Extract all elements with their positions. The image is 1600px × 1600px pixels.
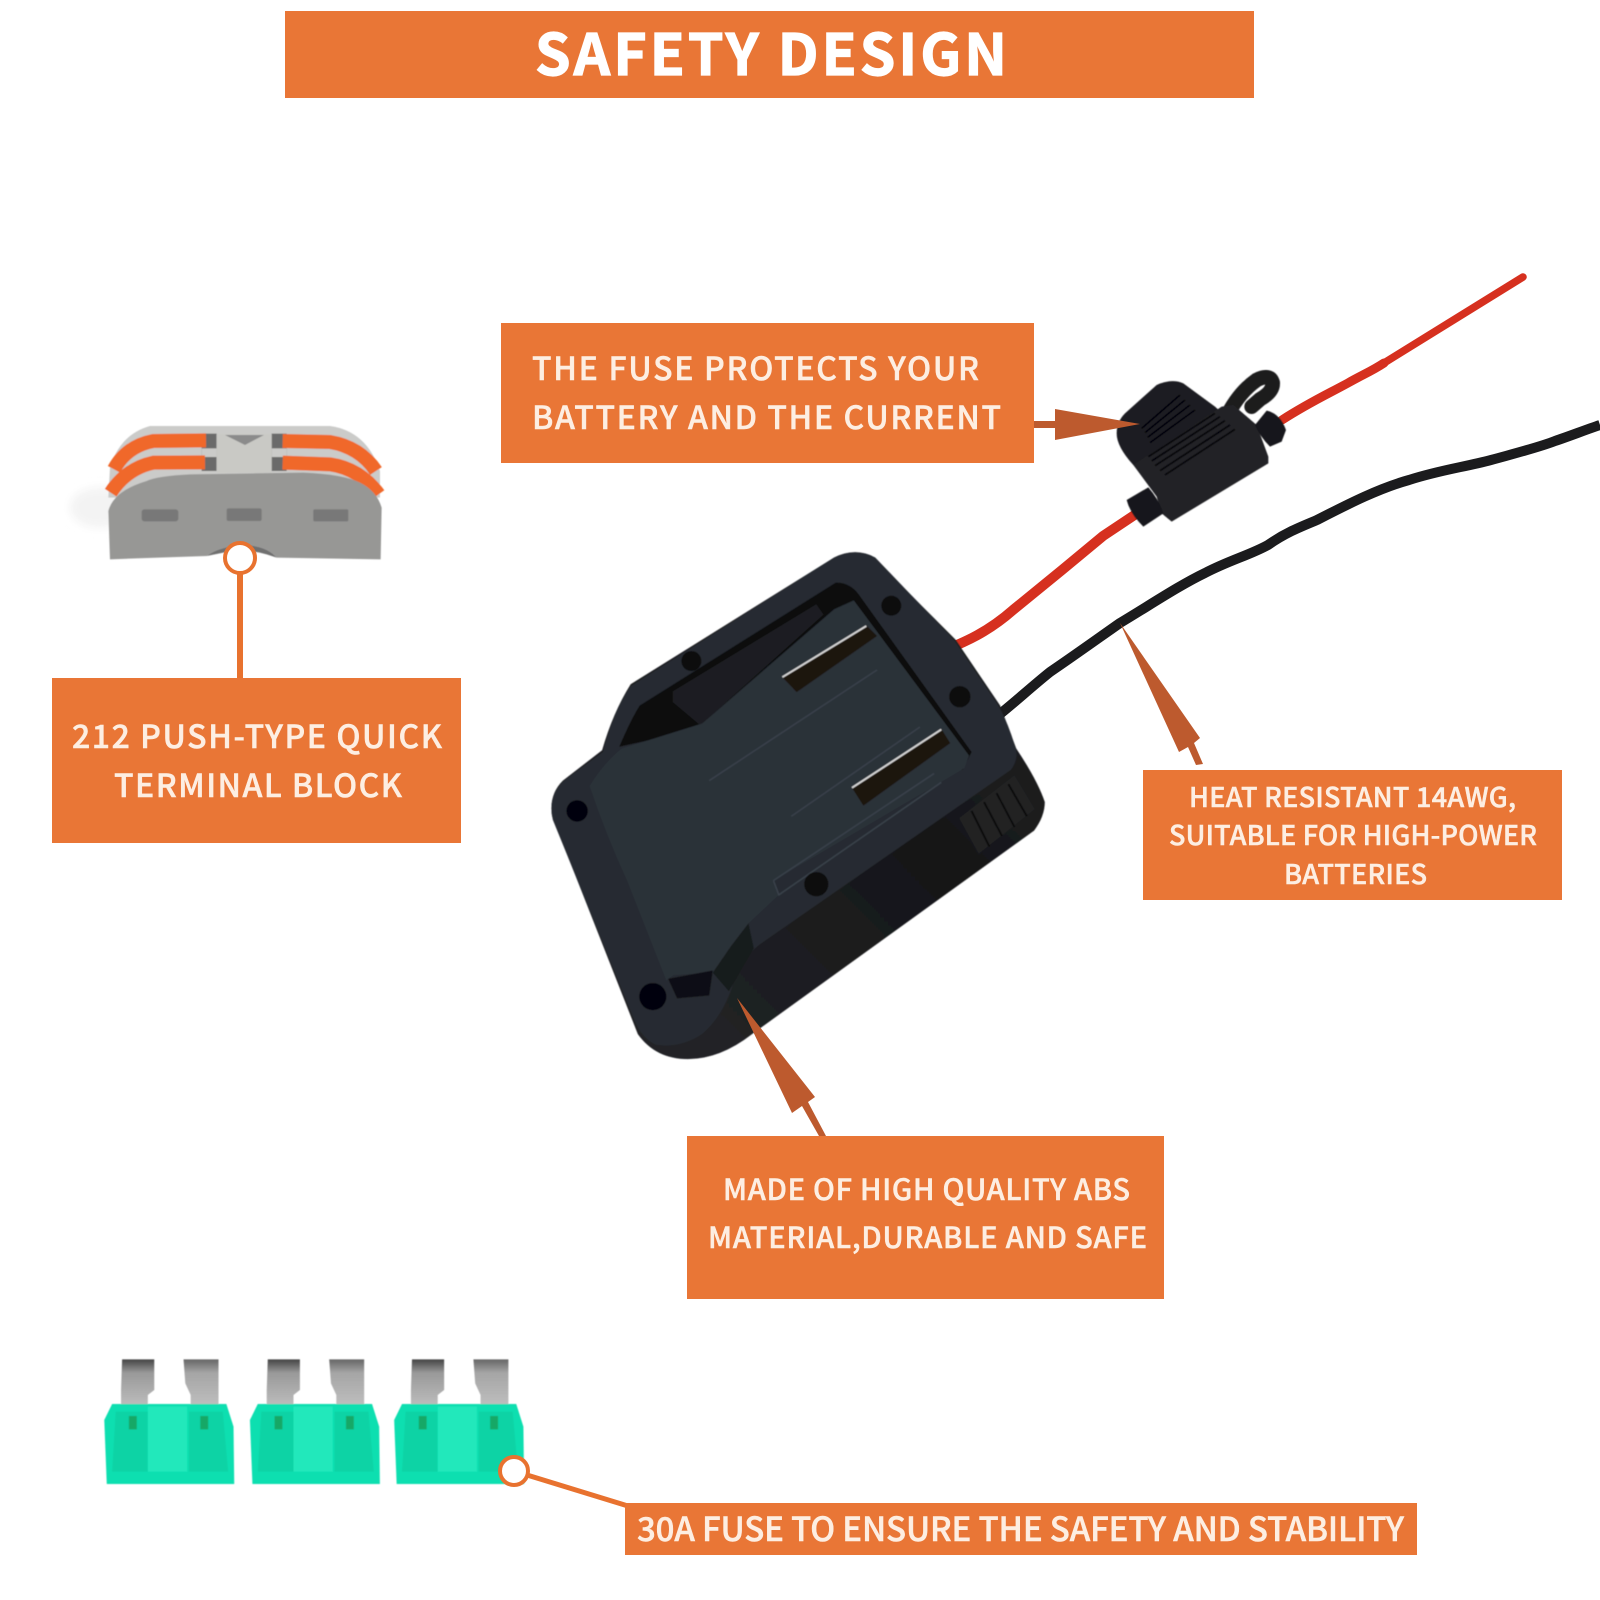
screw holes <box>681 596 971 896</box>
callout: heat resistant wire <box>1143 770 1562 900</box>
front openings <box>142 508 348 521</box>
face etched lines <box>709 670 941 895</box>
callout text: BATTERIES <box>1284 853 1427 892</box>
grip ribs <box>1142 395 1235 475</box>
lower notch <box>668 971 713 998</box>
callout: fuse protects battery <box>501 323 1034 463</box>
callout text: THE FUSE PROTECTS YOUR <box>532 344 979 390</box>
mounting holes <box>566 800 666 1010</box>
body silhouette <box>551 553 1045 1059</box>
side ribs <box>959 775 1035 854</box>
red wire <box>945 277 1523 650</box>
contact face <box>590 600 969 981</box>
arrow: to fuse holder <box>1017 409 1140 440</box>
fuse connector line <box>500 1457 628 1506</box>
front face <box>108 473 382 559</box>
icon: battery adapter body <box>551 552 1045 1059</box>
callout: 30A fuse <box>625 1503 1417 1555</box>
callout text: MADE OF HIGH QUALITY ABS <box>723 1167 1130 1209</box>
icon: terminal block <box>70 426 382 559</box>
fuse 3 <box>394 1359 524 1484</box>
callout text: MATERIAL,DURABLE AND SAFE <box>708 1215 1147 1257</box>
centre bridge <box>217 434 272 473</box>
black wire <box>990 425 1600 722</box>
icon: three 30A fuses <box>104 1359 524 1484</box>
title banner <box>285 10 1254 98</box>
orange levers <box>111 440 379 494</box>
callout text: 30A FUSE TO ENSURE THE SAFETY AND STABILITY <box>637 1503 1405 1551</box>
callout text: 212 PUSH-TYPE QUICK <box>72 712 443 758</box>
holder cap <box>1117 381 1233 483</box>
callout text: HEAT RESISTANT 14AWG, <box>1189 776 1516 815</box>
arrow: to adapter housing <box>737 998 826 1136</box>
callout text: BATTERY AND THE CURRENT <box>532 393 1001 439</box>
contact blade upper <box>782 625 877 692</box>
light bands between levers <box>202 448 287 457</box>
icon: inline fuse holder <box>1117 377 1286 527</box>
bridge notch <box>225 435 264 445</box>
soft shadow <box>70 488 130 528</box>
holder loop <box>1228 377 1273 413</box>
grey top <box>108 426 380 498</box>
callout text: SUITABLE FOR HIGH-POWER <box>1169 814 1537 853</box>
arrow: to black wire <box>1120 623 1203 765</box>
title text: SAFETY DESIGN <box>535 10 1007 92</box>
contact blade lower <box>852 729 950 806</box>
fuse 2 <box>250 1359 380 1484</box>
ridge <box>713 923 754 991</box>
terminal block connector line <box>225 543 255 679</box>
wire stubs <box>1127 411 1286 527</box>
slot shadows <box>202 434 287 471</box>
fuse 1 <box>104 1359 234 1484</box>
callout: ABS material <box>687 1136 1164 1299</box>
top plate <box>551 552 1016 1046</box>
dark recess <box>619 582 972 770</box>
notch shading <box>207 545 277 558</box>
slider bar <box>673 604 823 725</box>
callout text: TERMINAL BLOCK <box>114 761 403 807</box>
holder base <box>1133 405 1268 522</box>
callout: terminal block <box>52 678 461 843</box>
